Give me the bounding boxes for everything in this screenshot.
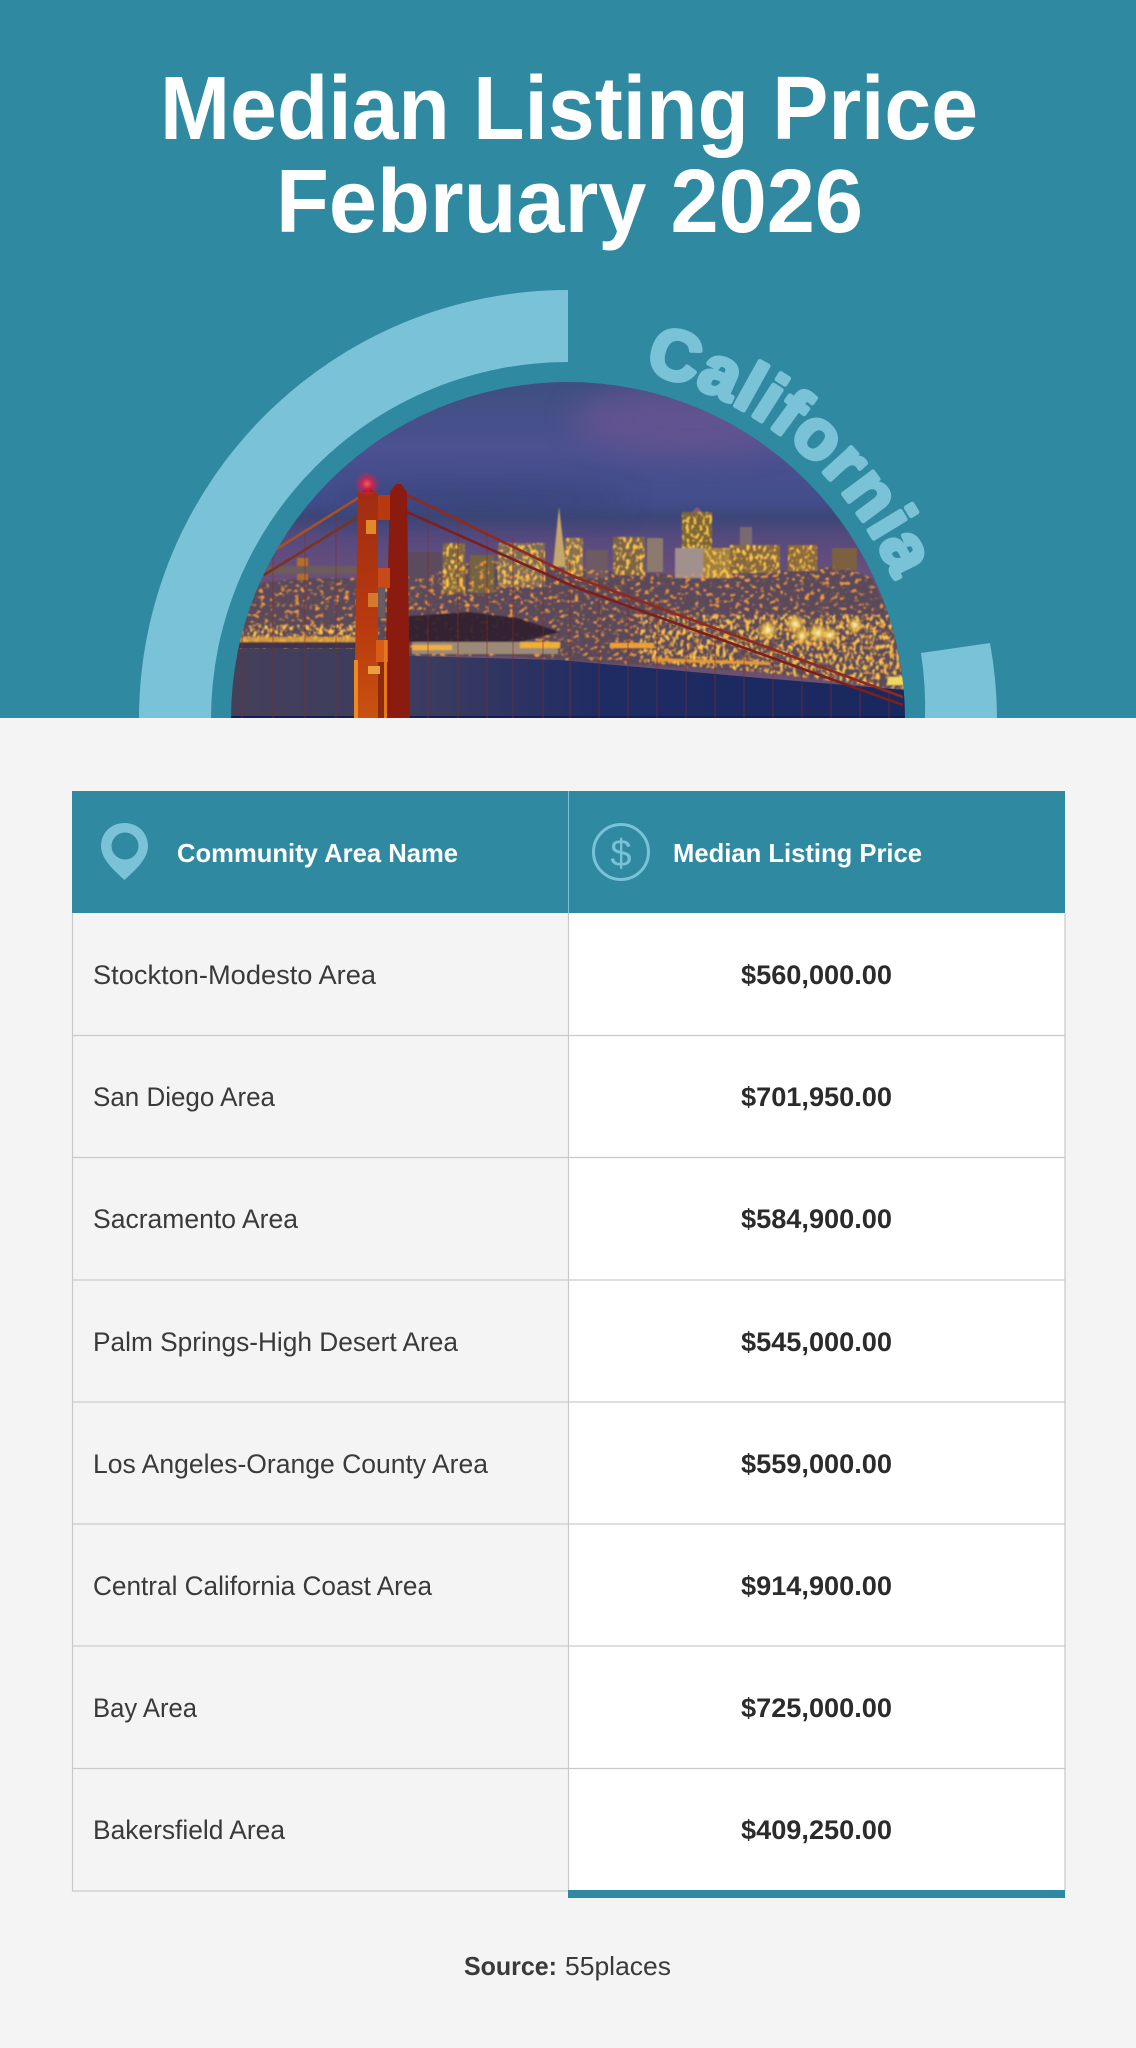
sky xyxy=(225,380,915,720)
row: Sacramento Area: Sacramento Area xyxy=(93,1204,299,1234)
header band xyxy=(0,0,1136,718)
icon: map pin xyxy=(101,823,148,880)
bottom accent bar xyxy=(568,1890,1065,1898)
row: Bakersfield Area: Bakersfield Area xyxy=(93,1815,286,1845)
row: Stockton-Modesto Area: $560,000.00 xyxy=(741,960,892,990)
piers and shoreline lights xyxy=(231,637,905,685)
row: Bay Area: $725,000.00 xyxy=(741,1693,892,1723)
table header row xyxy=(72,791,1065,913)
table xyxy=(72,791,1065,1898)
row: San Diego Area: San Diego Area xyxy=(93,1082,276,1112)
row: Bakersfield Area xyxy=(93,1815,892,1845)
row: Stockton-Modesto Area xyxy=(93,960,892,990)
row: Palm Springs-High Desert Area: Palm Springs-High Desert Area xyxy=(93,1327,459,1357)
header: community area name: Community Area Name xyxy=(177,838,458,868)
source note xyxy=(464,1951,671,1981)
row: Central California Coast Area: Central California Coast Area xyxy=(93,1571,433,1601)
source note: 55places xyxy=(565,1951,671,1981)
row: Central California Coast Area: $914,900.00 xyxy=(741,1571,892,1601)
row: San Diego Area: $701,950.00 xyxy=(741,1082,892,1112)
row: San Diego Area xyxy=(93,1082,892,1112)
row: Bay Area: Bay Area xyxy=(93,1693,198,1723)
tower beacon xyxy=(354,472,380,496)
header: median listing price: Median Listing Price xyxy=(673,838,922,868)
table left column background xyxy=(72,913,568,1891)
decorative arc right xyxy=(921,643,997,718)
table right column background xyxy=(568,913,1065,1891)
decorative arc left xyxy=(139,290,568,718)
city lights xyxy=(242,560,902,690)
bridge tower xyxy=(354,484,410,718)
table grid xyxy=(72,913,1065,1891)
row: Stockton-Modesto Area: Stockton-Modesto Area xyxy=(93,960,377,990)
bridge main cables xyxy=(264,495,903,705)
row: Los Angeles-Orange County Area: Los Angeles-Orange County Area xyxy=(93,1449,489,1479)
row: Central California Coast Area xyxy=(93,1571,892,1601)
icon: dollar coin xyxy=(594,824,648,880)
row: Sacramento Area xyxy=(93,1204,892,1234)
row: Los Angeles-Orange County Area xyxy=(93,1449,892,1479)
title: February 2026 xyxy=(276,152,863,252)
row: Palm Springs-High Desert Area xyxy=(93,1327,892,1357)
title xyxy=(160,59,978,252)
row: Los Angeles-Orange County Area: $559,000.00 xyxy=(741,1449,892,1479)
street-light glare xyxy=(757,613,864,645)
source note: Source: xyxy=(464,1951,557,1981)
dark shoreline hill xyxy=(408,612,560,642)
row: Bay Area xyxy=(93,1693,892,1723)
skyline buildings xyxy=(262,507,857,593)
row: Palm Springs-High Desert Area: $545,000.00 xyxy=(741,1327,892,1357)
photo: Golden Gate Bridge and San Francisco skyline at dusk xyxy=(225,380,915,720)
curved label: California: California xyxy=(650,328,924,582)
water xyxy=(225,649,905,718)
row: Bakersfield Area: $409,250.00 xyxy=(741,1815,892,1845)
city xyxy=(225,507,910,700)
bridge hangers xyxy=(242,504,889,718)
icon: dollar coin: $ xyxy=(610,833,632,875)
title: Median Listing Price xyxy=(160,59,978,159)
row: Sacramento Area: $584,900.00 xyxy=(741,1204,892,1234)
